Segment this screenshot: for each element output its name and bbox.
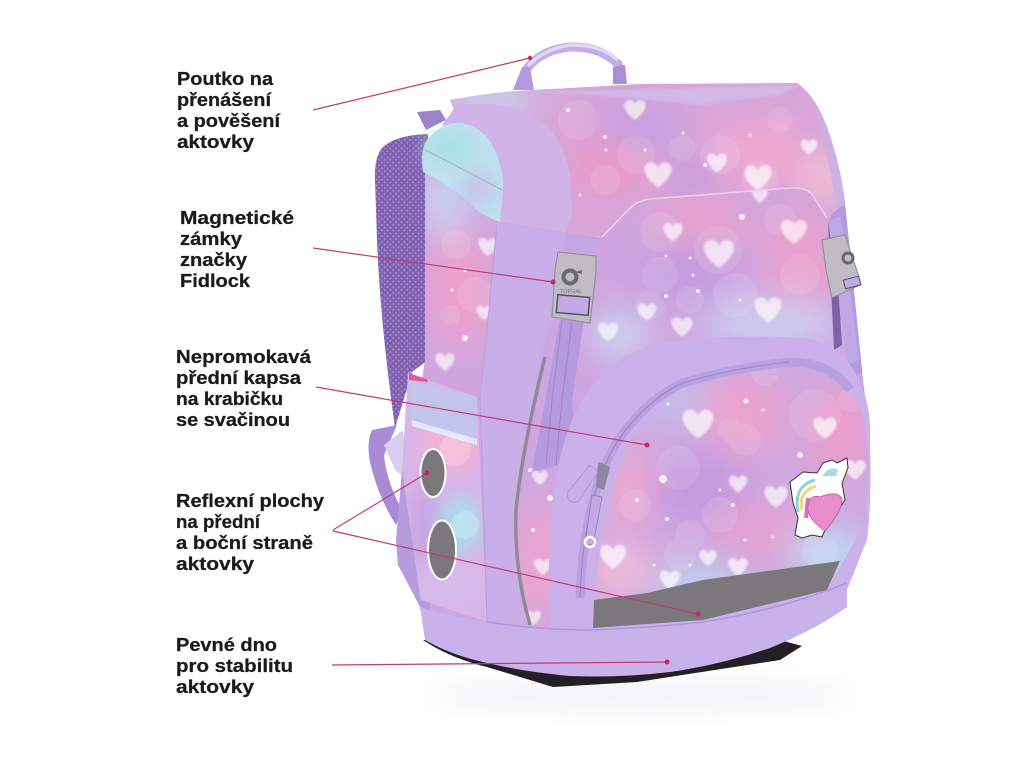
grey piping xyxy=(516,357,545,625)
unicorn patch xyxy=(790,458,848,538)
callout lines: reflective areas xyxy=(333,470,700,616)
label: reflective areas: na přední xyxy=(176,512,261,532)
label: magnetic locks: zámky xyxy=(180,229,242,249)
label: front pocket: na krabičku xyxy=(176,389,283,409)
label: rigid base: pro stabilitu xyxy=(176,656,293,676)
ground shadow xyxy=(425,681,855,709)
pocket zipper xyxy=(580,362,850,598)
pocket bokeh circles xyxy=(636,368,860,550)
callout line: base xyxy=(332,660,670,665)
lavender shoulder cap xyxy=(442,104,572,232)
label: magnetic locks: Magnetické xyxy=(180,208,294,228)
Fidlock magnetic buckle xyxy=(552,252,596,323)
label: front pocket: Nepromokavá xyxy=(176,347,312,367)
label: magnetic locks: Fidlock xyxy=(180,271,251,291)
label: handle: a pověšení xyxy=(177,111,281,131)
webbing strap xyxy=(533,232,600,471)
label: front pocket xyxy=(176,347,312,430)
side pocket xyxy=(396,372,487,622)
reflective strip xyxy=(593,561,840,628)
Fidlock magnetic buckle: TOPGAL xyxy=(560,289,582,295)
label: front pocket: přední kapsa xyxy=(176,368,302,388)
flap bokeh circles xyxy=(558,100,793,198)
front pocket lavender surround xyxy=(549,336,871,640)
label: handle xyxy=(177,69,281,152)
right edge of body xyxy=(830,205,862,376)
patch rainbow tail xyxy=(797,480,815,512)
label: reflective areas: Reflexní plochy xyxy=(176,491,324,511)
sparkles on body xyxy=(450,214,745,532)
label: magnetic locks: značky xyxy=(180,250,247,270)
black sole xyxy=(423,640,802,687)
callout line: front pocket xyxy=(316,387,650,448)
label: handle: Poutko na xyxy=(177,69,274,89)
front pocket xyxy=(576,358,868,628)
pocket sparkles xyxy=(635,398,804,566)
mesh back padding xyxy=(368,110,446,525)
hearts on body xyxy=(435,189,807,625)
flap rim stripe xyxy=(530,85,800,105)
flap sparkles xyxy=(566,108,752,196)
pocket hearts xyxy=(600,410,866,589)
label: rigid base: aktovky xyxy=(176,677,254,697)
reflective circle: upper xyxy=(420,449,446,497)
label: reflective areas: aktovky xyxy=(176,554,254,574)
bokeh circles xyxy=(440,204,820,325)
pale blue ruffled corner xyxy=(422,123,503,222)
label: reflective areas xyxy=(176,491,324,574)
label: reflective areas: a boční straně xyxy=(176,533,313,553)
rigid base and sole xyxy=(420,583,847,687)
carry handle xyxy=(513,45,627,90)
patch heart xyxy=(808,494,842,531)
flap hearts xyxy=(624,100,817,191)
label: magnetic locks xyxy=(180,208,294,291)
label: handle: přenášení xyxy=(177,90,272,110)
callout line: handle xyxy=(313,56,532,110)
reflective circle: lower xyxy=(428,520,456,580)
label: rigid base: Pevné dno xyxy=(176,635,277,655)
main body printed fabric xyxy=(420,173,865,628)
flap pink trim xyxy=(602,188,827,237)
label: front pocket: se svačinou xyxy=(176,410,290,430)
lavender vertical band xyxy=(480,223,565,635)
patch unicorn head xyxy=(819,468,841,488)
label: rigid base xyxy=(176,635,293,697)
zipper pull xyxy=(567,462,610,547)
backpack illustration xyxy=(368,45,880,709)
top flap printed fabric xyxy=(440,80,860,240)
right buckle xyxy=(822,217,861,365)
label: handle: aktovky xyxy=(177,132,254,152)
callout line: magnetic locks xyxy=(313,248,556,284)
